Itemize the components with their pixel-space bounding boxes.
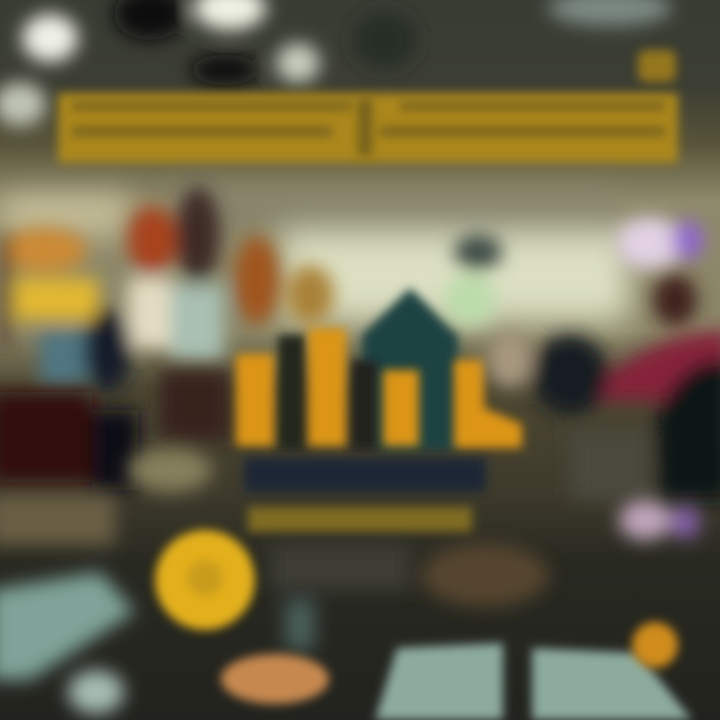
yellow caption strip — [248, 507, 472, 532]
cream back wall — [0, 190, 630, 322]
small yellow badge — [638, 50, 676, 82]
lower center details — [270, 543, 549, 650]
orange ellipse — [221, 654, 329, 704]
orange dot — [632, 622, 678, 668]
navy base — [244, 458, 486, 492]
left shelves and people — [0, 187, 334, 392]
bar chart — [236, 288, 522, 492]
dark house shape — [278, 288, 458, 450]
yellow circle icon — [155, 530, 255, 630]
orange bars — [236, 328, 522, 448]
lower table left — [0, 448, 212, 714]
right side people — [444, 234, 720, 500]
blurred title lines — [72, 98, 665, 156]
purple lights — [616, 217, 704, 540]
ceiling lights — [0, 0, 672, 126]
dark red seating — [0, 370, 230, 490]
yellow title banner — [58, 93, 678, 163]
pale teal panel bottom right — [375, 643, 692, 720]
